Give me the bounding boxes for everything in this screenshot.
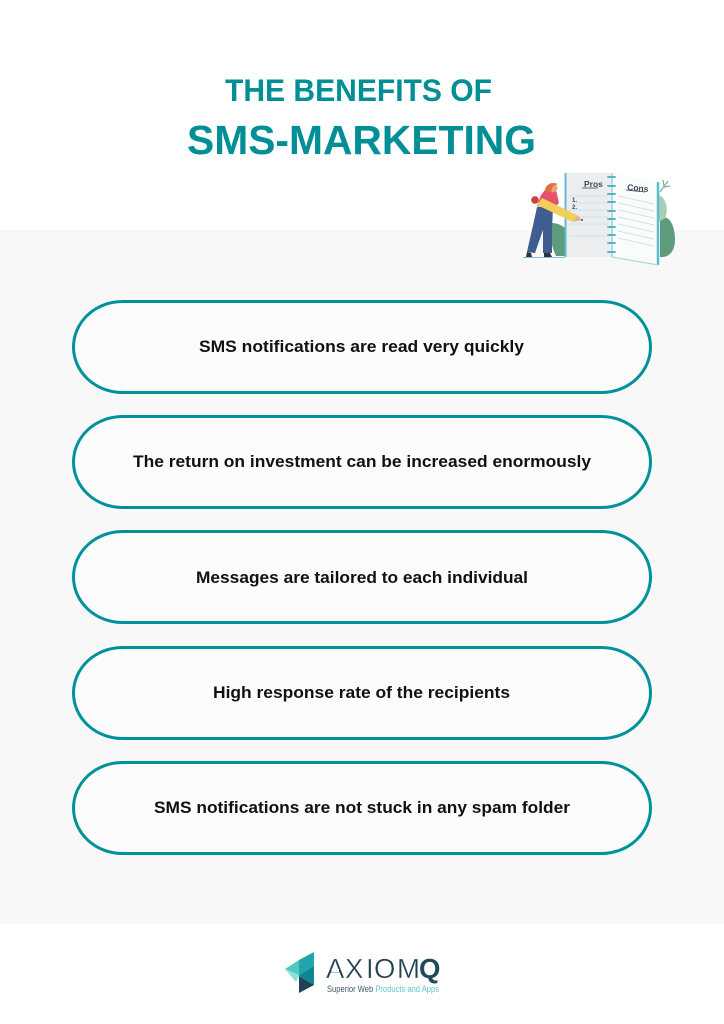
title — [187, 72, 536, 163]
icon: notebook — [565, 173, 658, 265]
panel: benefit 2 — [74, 416, 650, 508]
icon: plants behind notebook — [551, 180, 675, 257]
tagline: Superior Web Products and Apps — [327, 984, 439, 994]
wordmark: AXIOM — [326, 953, 420, 984]
panel: benefit 5 — [74, 762, 650, 854]
logo: AxiomQ — [285, 952, 440, 994]
panel: benefit 4 — [74, 648, 650, 738]
icon: logo mark — [285, 952, 314, 993]
title: THE BENEFITS OF — [225, 72, 492, 108]
panel: benefit 1 — [74, 302, 650, 392]
panel: benefit 2: The return on investment can be increased enormously — [133, 452, 592, 471]
icon: notebook: Cons — [627, 182, 649, 194]
icon: notebook: 2. — [572, 205, 577, 211]
panel: grey content background — [0, 230, 724, 924]
panel: benefit 5: SMS notifications are not stuck in any spam folder — [154, 798, 570, 817]
panel: benefit 1: SMS notifications are read very quickly — [199, 337, 525, 356]
icon: notebook: Pros — [584, 179, 603, 189]
title: SMS-MARKETING — [187, 117, 536, 163]
panel: benefit 3 — [74, 532, 650, 622]
panel: benefit 4: High response rate of the recipients — [213, 683, 510, 702]
wordmark: Q — [419, 953, 440, 984]
icon: woman holding giant pencil — [523, 183, 583, 258]
panel: benefit 3: Messages are tailored to each individual — [196, 568, 528, 587]
icon: notebook: 1. — [572, 198, 577, 204]
illustration: woman with pencil and pros and cons notebook — [523, 173, 675, 265]
